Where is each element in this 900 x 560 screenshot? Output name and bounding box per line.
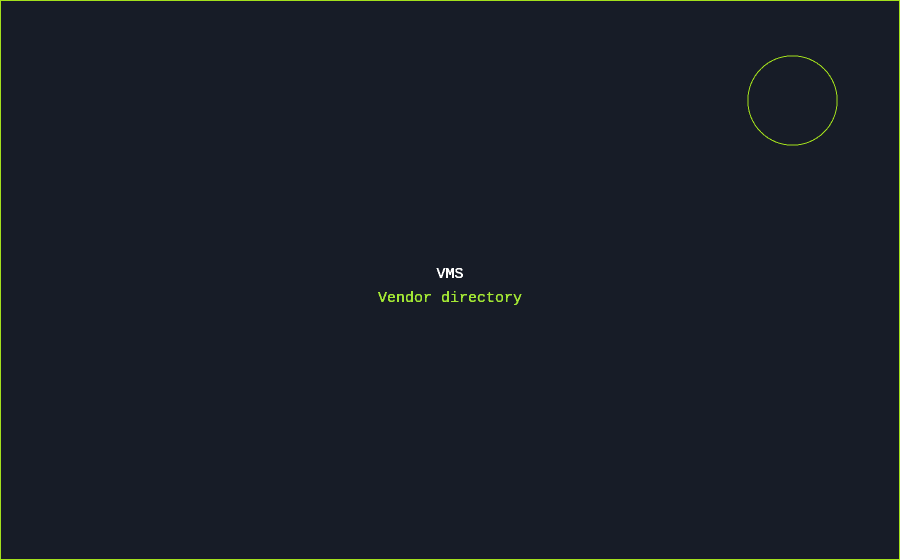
subtitle: Vendor directory	[378, 290, 522, 307]
title: VMS	[436, 266, 464, 283]
icon: outlined circle	[748, 56, 838, 146]
